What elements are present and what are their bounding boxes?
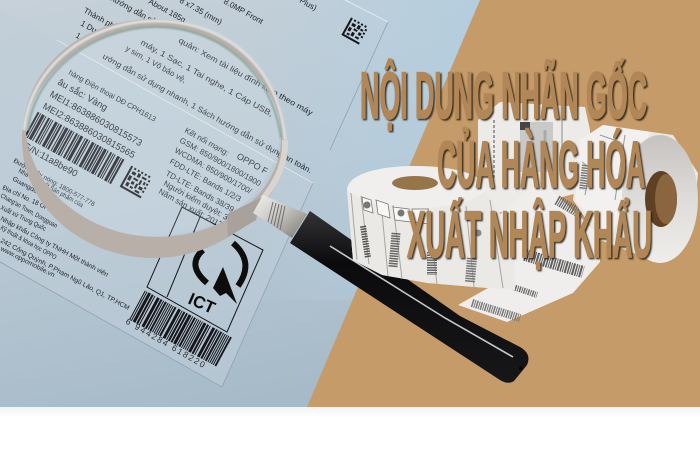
lens glass (28, 20, 280, 236)
upper specification text: 1 S (74, 31, 89, 45)
right label roll (573, 125, 698, 263)
importer address text: www.oppomobile.vn (0, 245, 56, 279)
ICT certification box (147, 207, 263, 332)
network specification text (157, 126, 270, 230)
importer address text: Địa chỉ No. 18 OPPO Mobile Telecommun (1, 184, 110, 240)
upper specification text: Thành phần (82, 6, 124, 34)
data matrix code (120, 166, 152, 198)
product info text: âu sắc: Vàng (56, 77, 109, 114)
product info text: hàng Điện thoại DĐ CPH1613 (67, 68, 158, 124)
label strip (458, 180, 600, 322)
network specification text: OPPO F (235, 151, 270, 176)
background: tan panel (307, 0, 700, 407)
network specification text: GSM: 850/900/1800/1900 (178, 136, 263, 188)
network specification text: TD-LTE: Bands 38/39 (164, 169, 236, 214)
importer address text: Nhập khẩu Công ty TNHH Một thành viên (0, 215, 110, 279)
upper specification text (74, 0, 319, 175)
barcode digits: 6 944284 618220 (124, 316, 207, 370)
black handle (290, 211, 528, 383)
product info text (22, 68, 158, 180)
lens top glass rim (28, 27, 281, 138)
importer address text: Chang'an Town, Dongguan (0, 193, 59, 230)
importer address text: Đường dây nóng: 1800-577-776 (12, 158, 96, 209)
handle bracket (227, 197, 262, 237)
product info text: S/N:11a8be90 (22, 141, 79, 180)
importer address text: Xuất xứ Trung Quốc (0, 203, 49, 233)
sheet edge lines (0, 0, 388, 387)
importer address text: 242 Cống Quỳnh, P.Phạm Ngũ Lão, Q1, TP.HCM (0, 236, 131, 312)
importer address text (0, 158, 131, 312)
left roll core (392, 176, 438, 190)
label sheet (0, 0, 388, 387)
upper specification text: 1 Dung (79, 19, 106, 39)
left label roll (347, 166, 515, 290)
ICT certification box: ICT (185, 289, 219, 318)
importer address text: Guangdong (11, 176, 45, 199)
metal ferrule (253, 195, 307, 238)
barcode: product EAN (137, 305, 224, 352)
product info text: MEI2:863886030815565 (41, 100, 137, 160)
network specification text: Năm sản xuất: 2017 (157, 187, 224, 230)
upper specification text: ướng dẫn sử dụng nhanh, 1 Sách hướng dẫn sử dụng an toàn. (101, 52, 314, 175)
product info text: MEI1:863886030815573 (48, 88, 144, 148)
upper specification text: y sim, 1 Võ bảo vệ, (124, 44, 188, 85)
left roll label cells (351, 193, 503, 288)
data matrix code: top right (341, 17, 369, 45)
barcode: IMEI (31, 124, 118, 172)
back label roll (478, 102, 590, 215)
title (360, 58, 652, 271)
importer address text: Nhà sản xuất Sản phẩm của (17, 166, 85, 209)
sheet face (0, 10, 313, 387)
magnifying glass (22, 19, 528, 383)
upper specification text: quản: Xem tài liệu đính kèm theo máy (177, 36, 314, 117)
lens ring (22, 19, 286, 258)
label rolls (347, 102, 698, 322)
right roll end face (622, 135, 698, 263)
upper specification text: máy, 1 Sạc, 1 Tai nghe, 1 Cáp USB, (139, 38, 275, 118)
network specification text: FDD-LTE: Bands 1/2/3 (168, 157, 243, 204)
network specification text: Kết nối mạng: (183, 126, 231, 158)
network specification text: Người kiểm duyệt: 3 (162, 179, 230, 222)
network specification text: WCDMA: 850/900/1700/ (173, 146, 254, 196)
importer address text: Kỹ thuật & khoa học OPPO (0, 225, 58, 261)
bottom white band (0, 407, 700, 450)
ICT logo (195, 250, 207, 283)
